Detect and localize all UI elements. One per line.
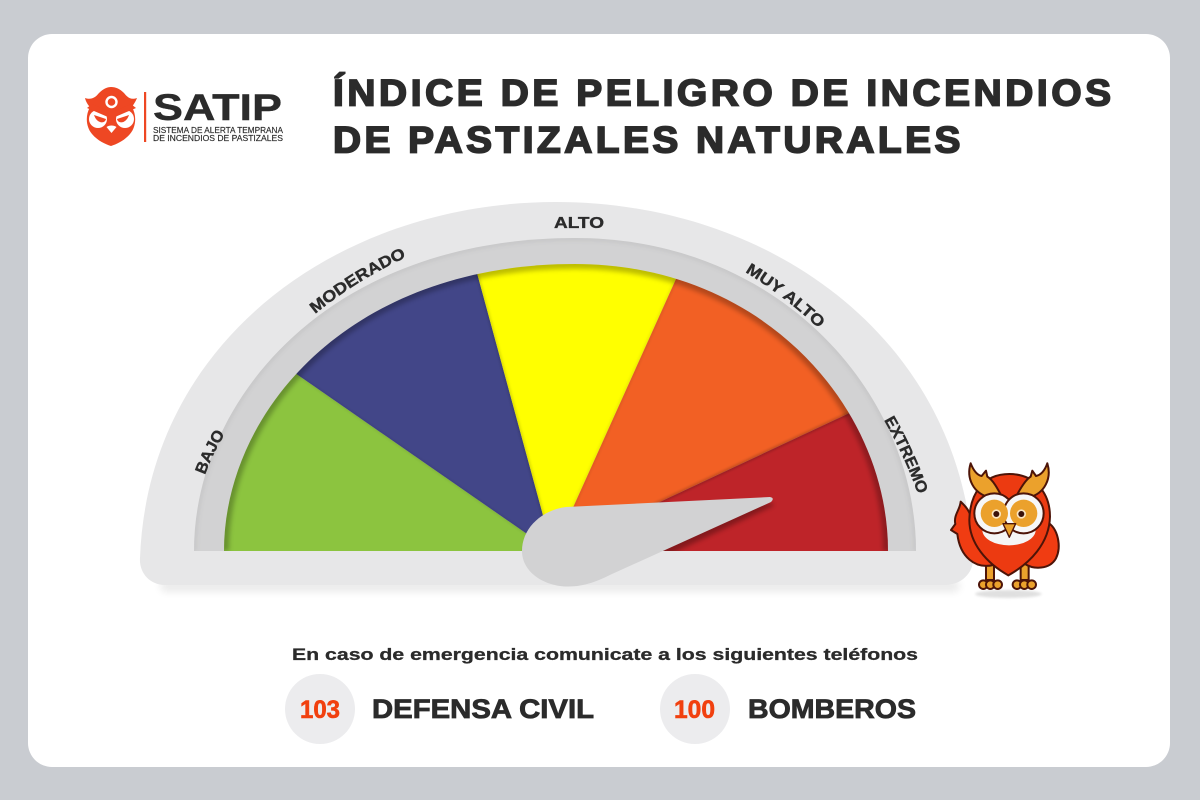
gauge labels (194, 215, 927, 492)
label: muy alto: MUY ALTO (746, 263, 824, 326)
title (333, 71, 1111, 161)
number badge 100 (660, 674, 730, 744)
title line one: ÍNDICE DE PELIGRO DE INCENDIOS (333, 71, 1111, 114)
logo wordmark: SATIP (153, 87, 282, 128)
label: alto: ALTO (554, 215, 604, 232)
sector: muy alto (573, 278, 849, 507)
gauge (140, 202, 972, 592)
sector: alto (477, 264, 676, 516)
owl legs and feet (979, 562, 1036, 589)
emergency heading: En caso de emergencia comunicate a los siguientes teléfonos (292, 645, 918, 664)
label: extremo: EXTREMO (884, 415, 927, 492)
gauge base shadow (160, 580, 960, 592)
label: moderado: MODERADO (309, 249, 404, 314)
icon: owl head (85, 87, 137, 146)
logo tagline: SISTEMA DE ALERTA TEMPRANA (153, 126, 284, 135)
contact: bomberos (660, 674, 916, 744)
icon: owl mascot (951, 463, 1059, 598)
label: bajo: BAJO (194, 430, 223, 474)
owl ear tufts (969, 463, 1049, 501)
logo divider (144, 92, 146, 142)
number badge 103: 103 (300, 696, 340, 724)
logo tagline line two: DE INCENDIOS DE PASTIZALES (153, 134, 283, 143)
number badge 100: 100 (674, 696, 715, 724)
label: defensa civil: DEFENSA CIVIL (372, 694, 594, 724)
sector: extremo (659, 413, 888, 551)
gauge inner ring (194, 238, 916, 551)
number badge 103 (285, 674, 355, 744)
owl body (969, 474, 1050, 575)
gauge outer housing (140, 202, 973, 585)
label: bomberos: BOMBEROS (748, 694, 916, 724)
gauge needle (522, 497, 773, 591)
title line two: DE PASTIZALES NATURALES (333, 120, 960, 161)
gauge coloured sectors (224, 264, 888, 551)
owl left wing (951, 502, 993, 566)
sector: bajo (224, 374, 526, 551)
owl face (974, 493, 1044, 545)
sector: moderado (296, 274, 543, 534)
contact: defensa civil (285, 674, 594, 744)
owl right wing (1025, 522, 1059, 568)
logo: SATIP (85, 87, 284, 146)
